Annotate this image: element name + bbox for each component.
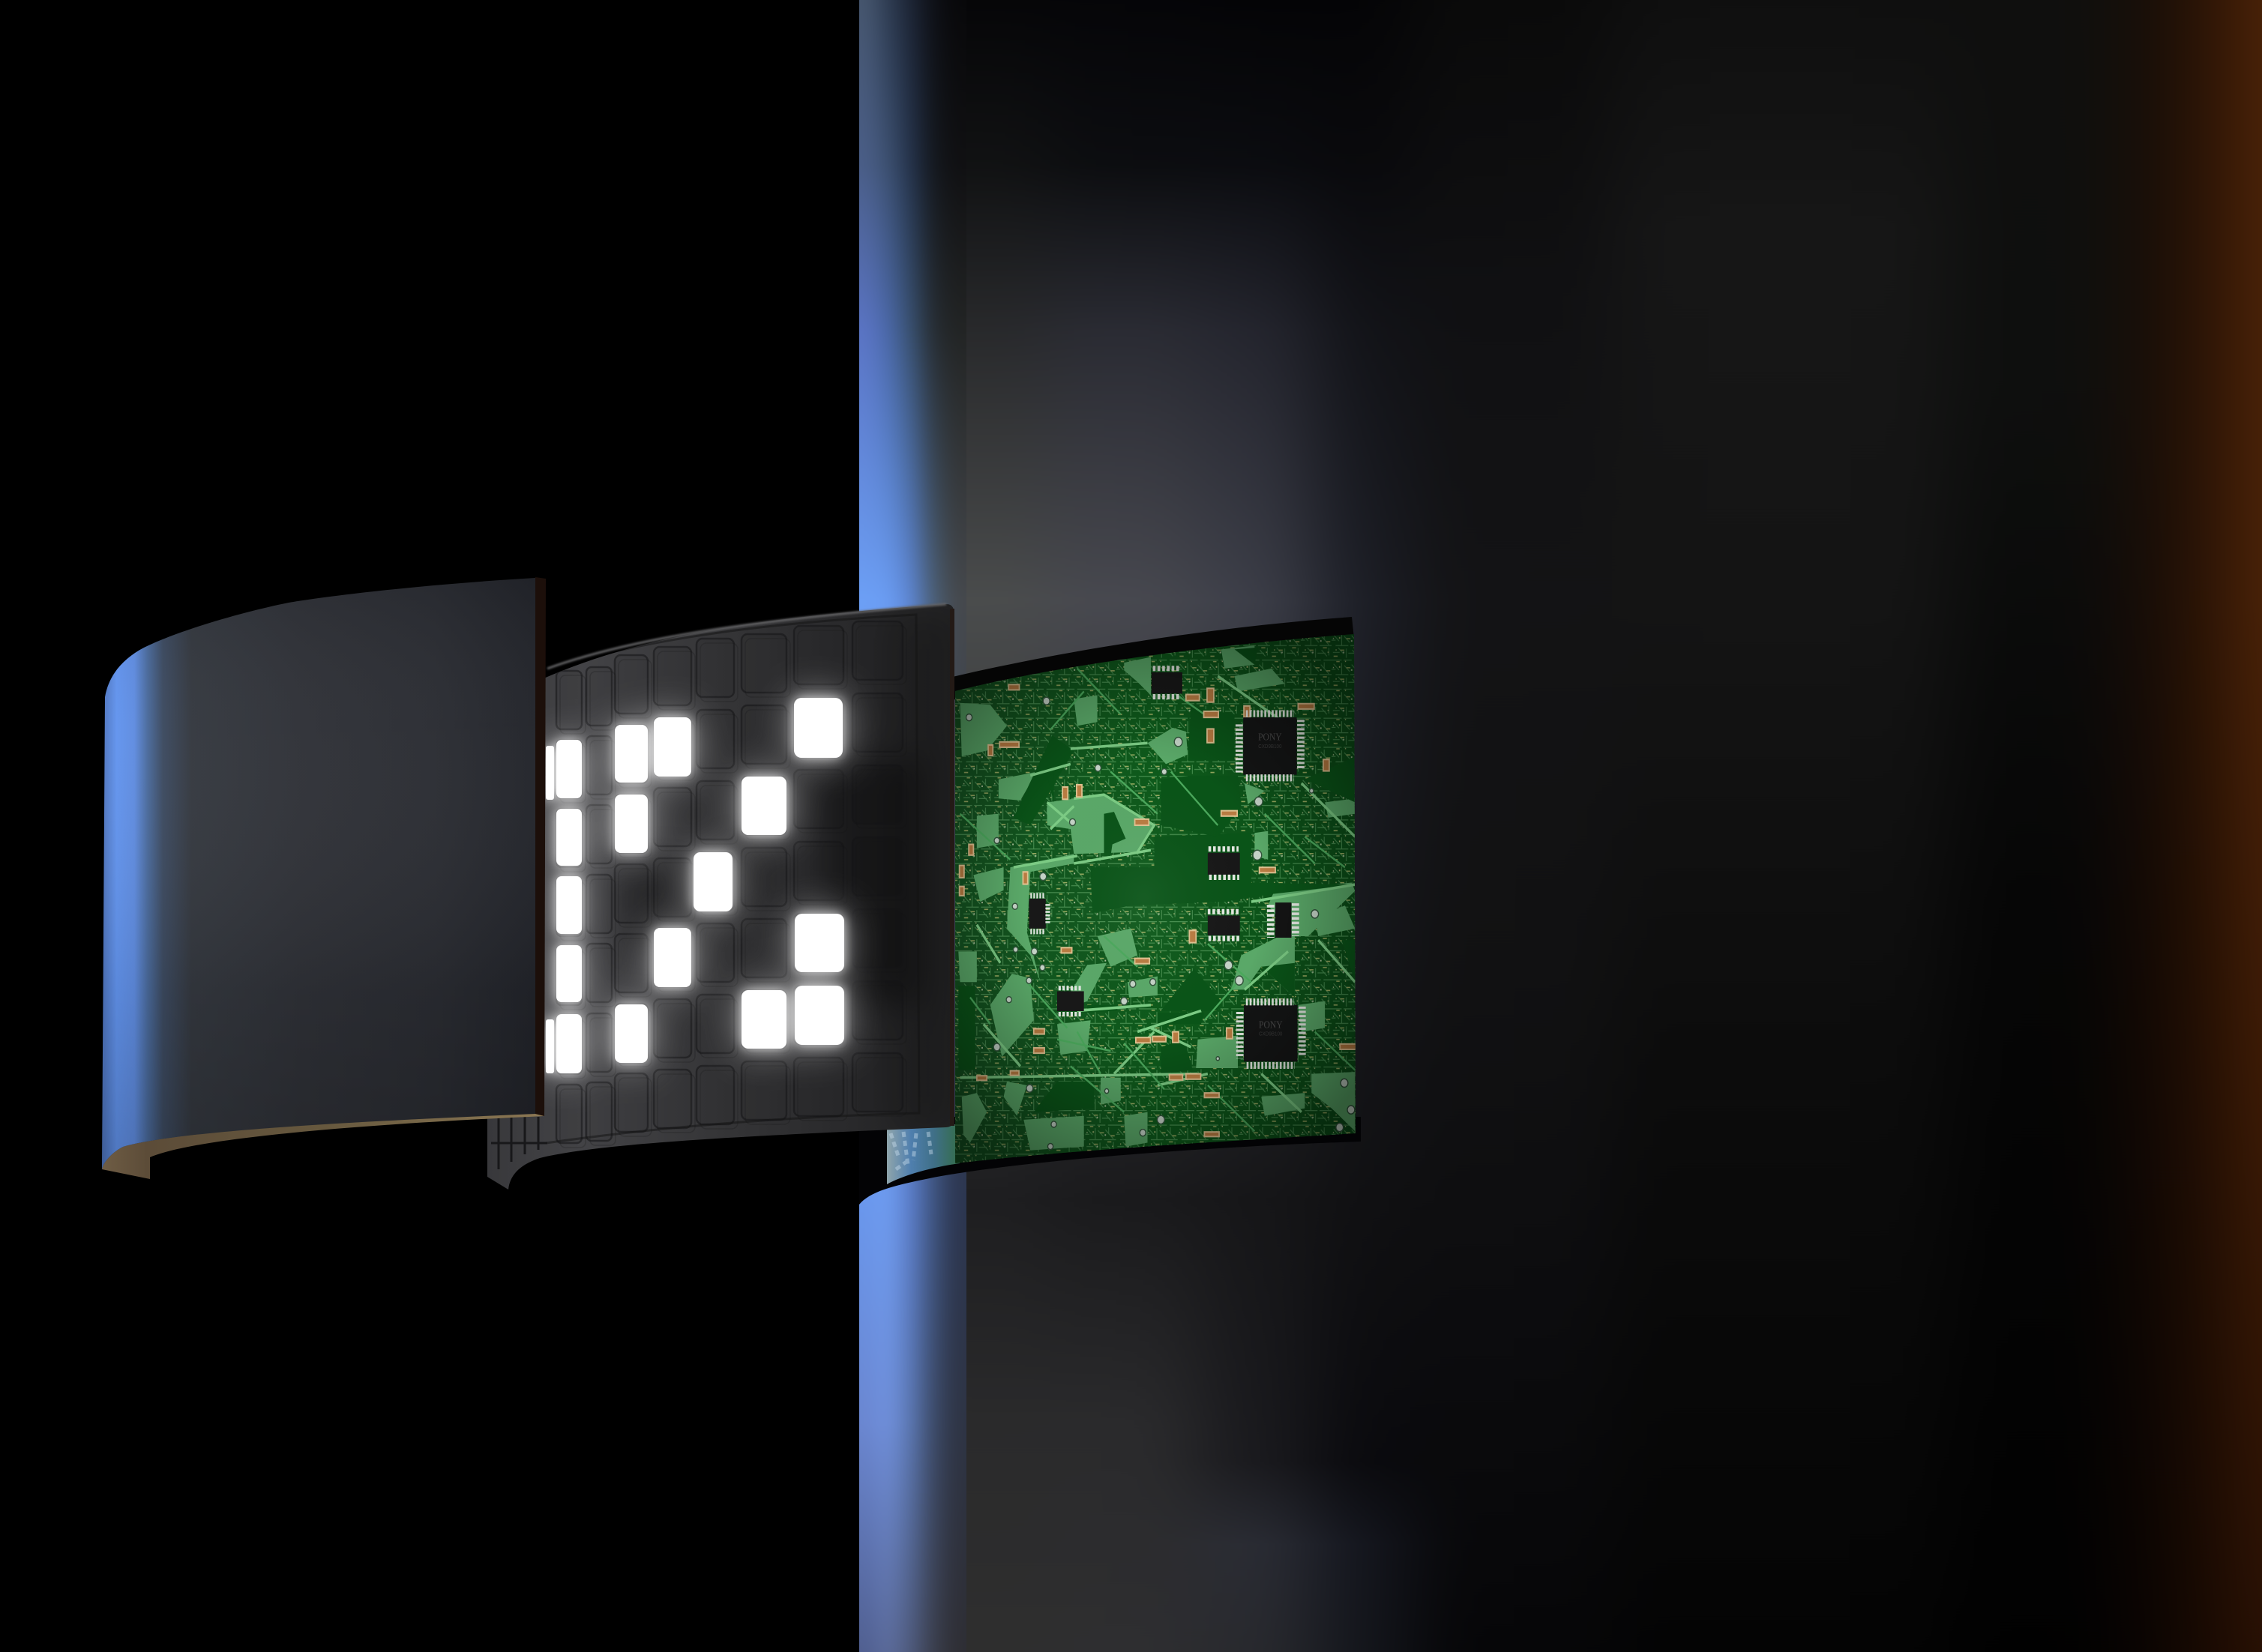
light copper pours <box>958 645 1355 1151</box>
wide glow around lit LEDs <box>546 698 844 1073</box>
dark upper edge of the circuit layer slot <box>946 617 1354 701</box>
column: cylinder body with blue rim light and orange edge light <box>810 0 2262 1652</box>
chip: large processor lower <box>1240 1002 1302 1065</box>
bright traces <box>960 676 1355 1112</box>
chip: large processor lower: CXD9B100 <box>1259 1031 1283 1037</box>
LED panel body <box>480 604 954 1190</box>
panel: LED matrix layer <box>480 604 960 1190</box>
panel: curved outer cover <box>102 577 546 1179</box>
LED panel top edge highlight <box>547 604 946 669</box>
frame line on the LED panel <box>546 615 919 1143</box>
lower left cells seen beneath the cover <box>491 1117 547 1169</box>
cover right edge <box>535 577 546 1116</box>
cover shading <box>102 578 535 1169</box>
lit LEDs <box>546 698 844 1073</box>
resistors and capacitors <box>960 684 1356 1136</box>
chip: large processor lower: PONY <box>1259 1019 1283 1031</box>
chip: large processor upper: PONY <box>1258 732 1282 743</box>
chip: large processor upper <box>1239 714 1301 778</box>
small chips <box>1029 669 1296 1014</box>
cover front face <box>102 578 535 1169</box>
column opening: dark slot behind the circuit layer <box>859 1117 1361 1205</box>
LED cell grid <box>556 621 906 1148</box>
dark copper pours <box>958 648 1355 1112</box>
vias and screw pads <box>966 697 1355 1150</box>
LED panel right edge <box>950 609 954 1126</box>
board lighting <box>950 623 1362 1173</box>
trace texture <box>950 623 1362 1173</box>
shaded patches on the LED panel <box>619 734 940 1027</box>
chip: large processor upper: CXD9B100 <box>1258 744 1282 750</box>
tight glow around lit LEDs <box>546 698 844 1073</box>
circuit board artwork in local coordinates <box>950 623 1362 1173</box>
cover lower lip <box>102 1112 544 1179</box>
reflective strip of the flexible sheet <box>887 1124 960 1184</box>
panel: printed circuit board layer <box>950 623 1362 1173</box>
